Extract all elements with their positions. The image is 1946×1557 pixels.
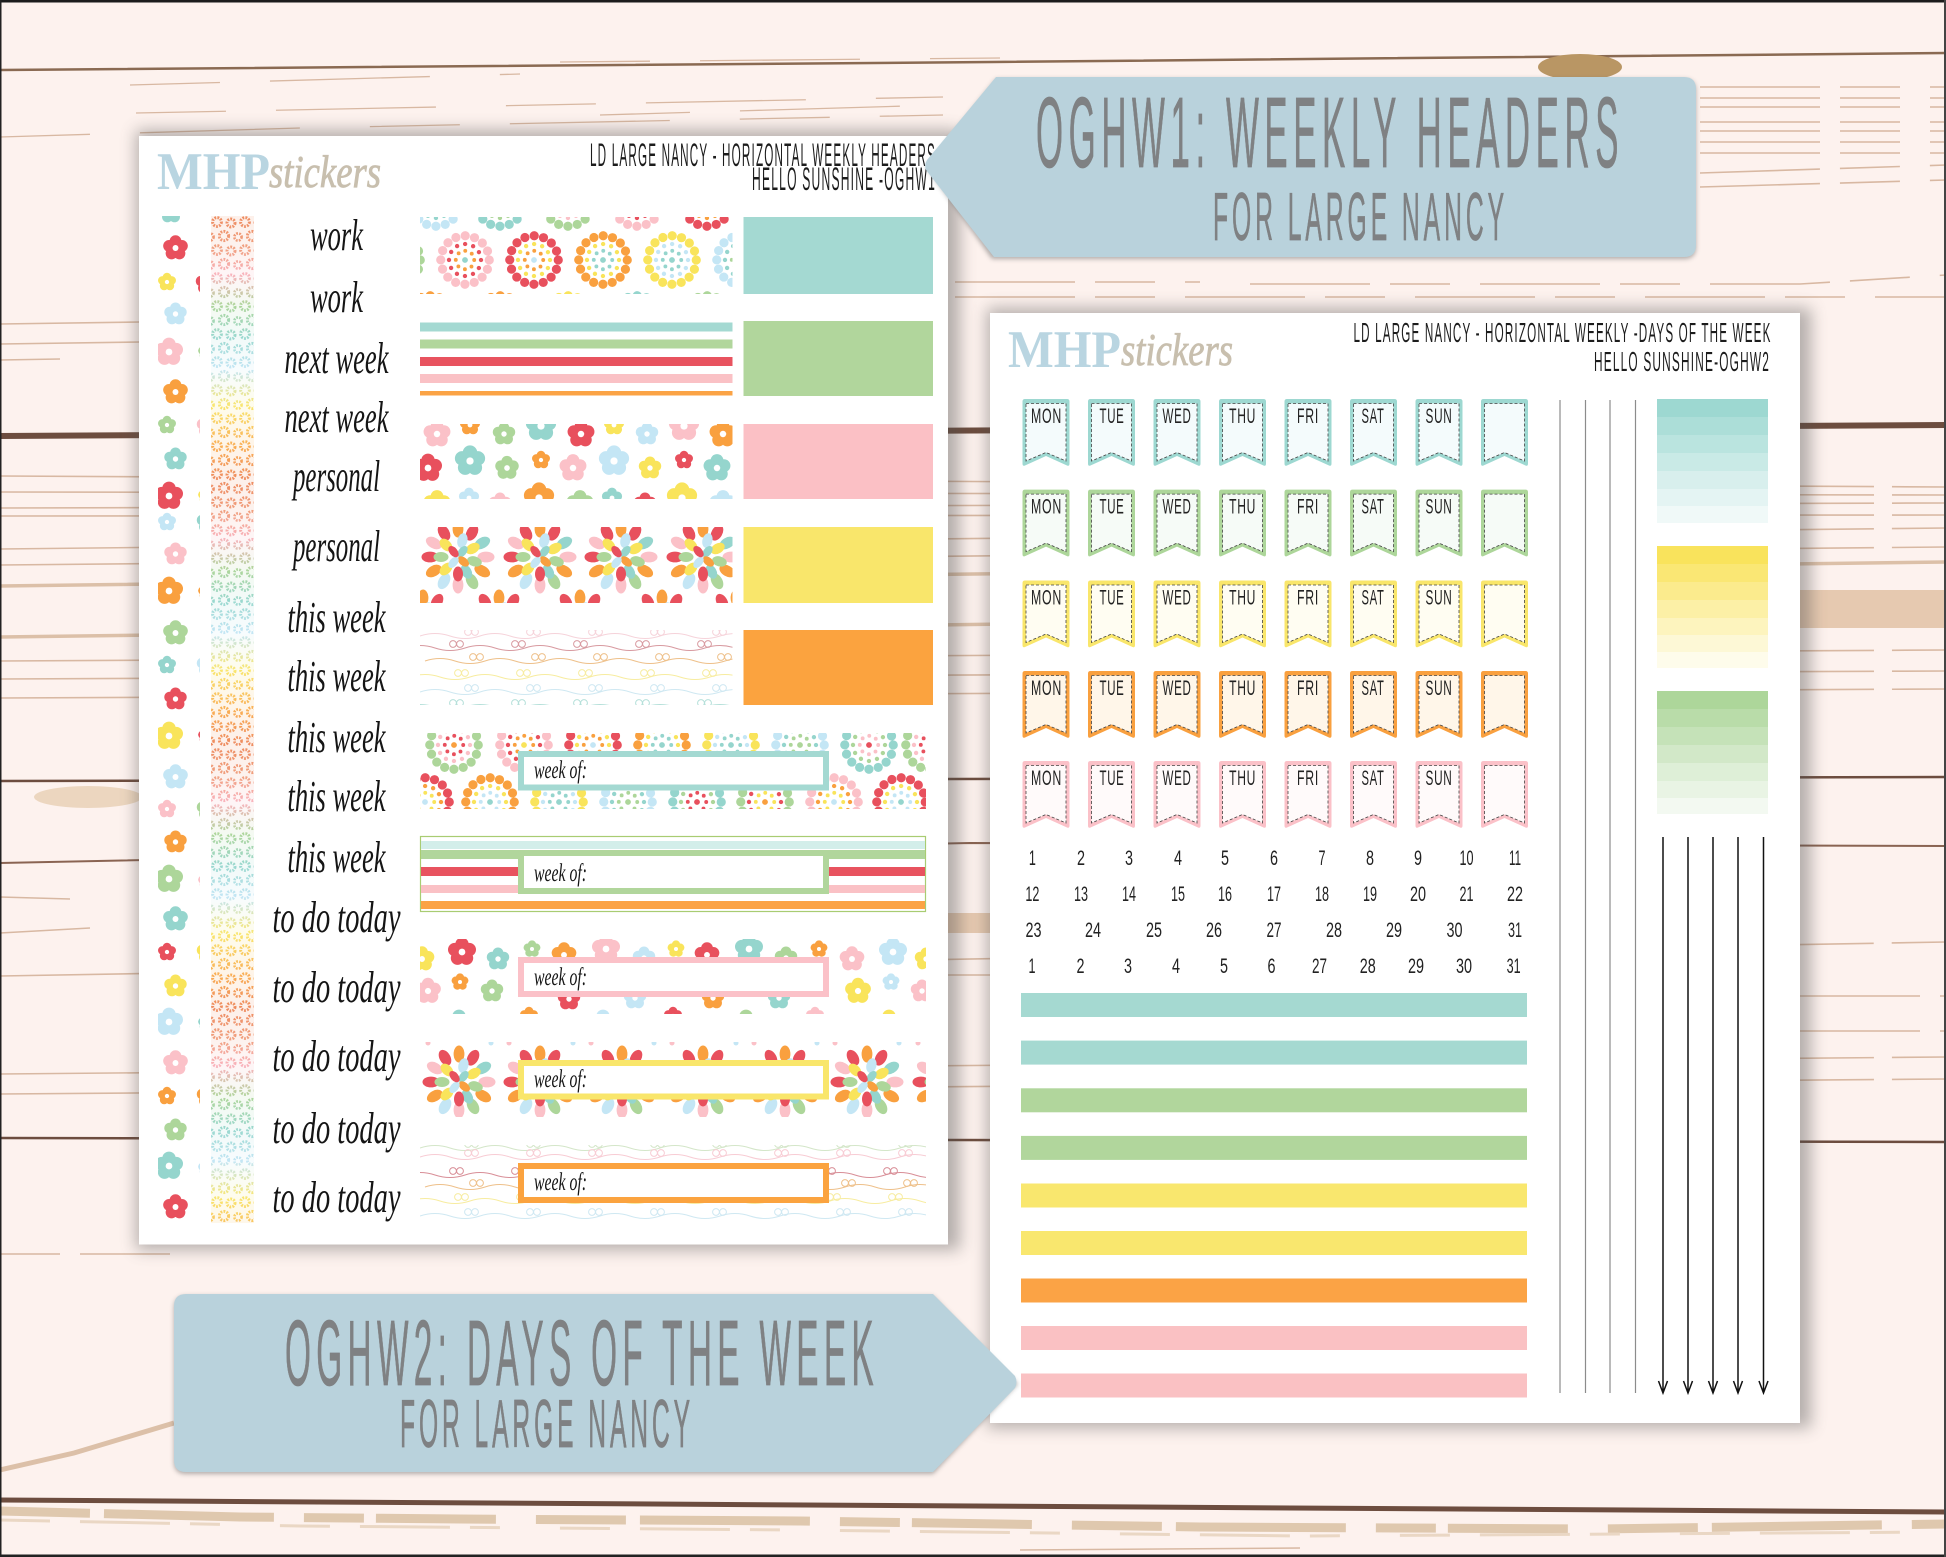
sheet 1 header text: [590, 137, 936, 197]
flag row: orange: [1022, 671, 1528, 738]
date numbers grid: 12: [1025, 883, 1039, 906]
header strip 4: petal bursts with week-of label: week of:: [534, 1066, 587, 1093]
date numbers grid: 29: [1386, 919, 1402, 942]
flag row: pink: SUN: [1426, 767, 1452, 790]
script word column: to do today: [272, 1032, 401, 1081]
sheet 2: days of the week: [987, 308, 1811, 1428]
header strip 1: rosettes with week-of label: [420, 733, 926, 809]
header strip 2: stripes with week-of label: week of:: [534, 860, 587, 887]
header strip 4: petal bursts with week-of label: [422, 1042, 926, 1117]
tag: OGHW1 weekly headers: [925, 77, 1696, 259]
date numbers grid: 11: [1509, 847, 1521, 870]
date numbers grid: [1025, 847, 1523, 978]
flag row: yellow: WED: [1162, 586, 1192, 610]
date numbers grid: 14: [1122, 883, 1136, 906]
header strip 1: rosettes with week-of label: week of:: [534, 757, 587, 784]
script word column: work: [310, 211, 364, 260]
colour block: teal: [744, 217, 933, 294]
vertical hairlines: [1560, 400, 1636, 1393]
flag row: orange: SAT: [1362, 677, 1384, 700]
flag row: teal: TUE: [1100, 405, 1124, 428]
flag row: green: WED: [1162, 496, 1192, 519]
date numbers grid: 10: [1460, 847, 1474, 870]
flag row: yellow: [1022, 580, 1528, 647]
colour block: pink: [744, 424, 933, 499]
date numbers grid: 22: [1507, 883, 1523, 906]
date numbers grid: 25: [1146, 919, 1162, 942]
text: LD LARGE NANCY - HORIZONTAL WEEKLY HEADERS: [590, 137, 936, 173]
script word column: this week: [288, 593, 386, 642]
date numbers grid: 18: [1315, 883, 1329, 906]
date numbers grid: 6: [1270, 847, 1278, 870]
date numbers grid: 13: [1074, 883, 1088, 906]
flag row: green: [1022, 490, 1528, 556]
flag row: yellow: MON: [1031, 586, 1062, 610]
flag row: green: MON: [1031, 496, 1062, 519]
flag row: teal: SUN: [1426, 405, 1452, 428]
script word column: personal: [291, 452, 380, 501]
script word column: this week: [288, 833, 386, 882]
colour block: orange: [744, 630, 933, 705]
date numbers grid: 5: [1220, 955, 1228, 978]
flower column strip: [158, 216, 200, 1218]
flag row: yellow: SAT: [1362, 586, 1384, 610]
date numbers grid: 16: [1218, 883, 1232, 906]
header strip 3: flowers with week-of label: [420, 939, 926, 1014]
script word column: next week: [284, 334, 389, 383]
pattern strip: stripes: [420, 322, 732, 396]
script word column: work: [310, 273, 364, 322]
date numbers grid: 31: [1507, 955, 1521, 978]
script word column: to do today: [272, 1173, 401, 1222]
pattern strip: bow waves: [420, 630, 732, 705]
flag row: orange: SUN: [1426, 677, 1452, 700]
flag row: pink: [1022, 761, 1528, 828]
date numbers grid: 2: [1077, 847, 1085, 870]
script word column: this week: [288, 772, 386, 821]
flag row: green: FRI: [1297, 496, 1319, 519]
date numbers grid: 4: [1172, 955, 1180, 978]
flag row: orange: TUE: [1100, 677, 1124, 700]
script word column: this week: [288, 652, 386, 701]
date numbers grid: 3: [1124, 955, 1132, 978]
flag row: green: TUE: [1100, 496, 1124, 519]
header strip 2: stripes with week-of label: [420, 836, 926, 912]
date numbers grid: 3: [1125, 847, 1133, 870]
pattern strip: dotted rosettes: [420, 217, 732, 294]
header strip 5: bow waves with week-of label: week of:: [534, 1169, 587, 1196]
date numbers grid: 29: [1408, 955, 1424, 978]
flag row: orange: MON: [1031, 677, 1062, 700]
date numbers grid: 1: [1029, 847, 1036, 870]
logo: MHP stickers: MHP: [1008, 321, 1121, 379]
script word column: [272, 211, 401, 1222]
ombre swatch: green: [1657, 691, 1768, 814]
date numbers grid: 21: [1460, 883, 1474, 906]
flag row: green: THU: [1229, 496, 1256, 519]
logo: MHP stickers: [1008, 321, 1233, 379]
pattern strip: scattered flowers: [420, 424, 732, 499]
flag row: teal: THU: [1229, 405, 1256, 428]
flag row: orange: THU: [1229, 677, 1256, 700]
logo: MHP stickers: stickers: [1121, 324, 1233, 375]
rainbow floral strip: [211, 216, 254, 1223]
tag: OGHW2 days of the week: [174, 1294, 1018, 1474]
flag row: pink: FRI: [1297, 767, 1319, 790]
flag row: orange: FRI: [1297, 677, 1319, 700]
script word column: to do today: [272, 963, 401, 1012]
ombre swatch: yellow: [1657, 546, 1768, 668]
horizontal colour bars: [1021, 993, 1527, 1398]
pattern strip: petal bursts: [420, 527, 732, 603]
flag row: pink: TUE: [1100, 767, 1124, 790]
date numbers grid: 19: [1363, 883, 1377, 906]
colour block: green: [744, 321, 933, 396]
date numbers grid: 6: [1268, 955, 1276, 978]
flag row: teal: [1022, 399, 1528, 466]
flag row: teal: SAT: [1362, 405, 1384, 428]
flag row: teal: MON: [1031, 405, 1062, 428]
date numbers grid: 4: [1174, 847, 1182, 870]
date numbers grid: 27: [1312, 955, 1327, 978]
date numbers grid: 31: [1508, 919, 1522, 942]
script word column: to do today: [272, 1104, 401, 1153]
date numbers grid: 2: [1076, 955, 1084, 978]
text: HELLO SUNSHINE -OGHW1: [752, 161, 936, 197]
date numbers grid: 1: [1028, 955, 1036, 978]
date numbers grid: 28: [1326, 919, 1342, 942]
header strip 3: flowers with week-of label: week of:: [534, 964, 587, 991]
text: OGHW2: DAYS OF THE WEEK: [285, 1301, 879, 1405]
tag: OGHW2 days of the week: FOR LARGE NANCY: [400, 1386, 694, 1462]
script word column: next week: [284, 393, 389, 442]
date numbers grid: 30: [1446, 919, 1462, 942]
flag row: teal: FRI: [1297, 405, 1319, 428]
date numbers grid: 15: [1171, 883, 1185, 906]
date numbers grid: 8: [1366, 847, 1374, 870]
logo: MHP stickers: MHP: [157, 143, 270, 201]
flag row: yellow: FRI: [1297, 586, 1319, 610]
header strip 5: bow waves with week-of label: [420, 1145, 926, 1219]
date numbers grid: 20: [1410, 883, 1426, 906]
flag row: pink: THU: [1229, 767, 1256, 790]
script word column: personal: [291, 522, 380, 571]
colour block: yellow: [744, 527, 933, 603]
ombre swatch: teal: [1657, 399, 1768, 523]
flag row: orange: WED: [1162, 677, 1192, 700]
date numbers grid: 26: [1206, 919, 1222, 942]
flag row: green: SUN: [1426, 496, 1452, 519]
date numbers grid: 28: [1360, 955, 1376, 978]
date numbers grid: 23: [1026, 919, 1042, 942]
flag row: pink: MON: [1031, 767, 1062, 790]
sheet 2 header text: [1354, 317, 1772, 377]
date numbers grid: 27: [1266, 919, 1282, 942]
flag row: teal: WED: [1162, 405, 1192, 428]
flag row: yellow: SUN: [1426, 586, 1452, 610]
logo: MHP stickers: [157, 143, 381, 201]
date numbers grid: 17: [1267, 883, 1281, 906]
script word column: to do today: [272, 893, 401, 942]
logo: MHP stickers: stickers: [269, 146, 381, 197]
date numbers grid: 24: [1085, 919, 1101, 942]
arrow lines: [1658, 837, 1768, 1393]
flag row: pink: SAT: [1362, 767, 1384, 790]
date numbers grid: 9: [1414, 847, 1422, 870]
flag row: green: SAT: [1362, 496, 1384, 519]
script word column: this week: [288, 713, 386, 762]
flag row: yellow: TUE: [1100, 586, 1124, 610]
flag row: pink: WED: [1162, 767, 1192, 790]
date numbers grid: 5: [1221, 847, 1229, 870]
flag row: yellow: THU: [1229, 586, 1256, 610]
date numbers grid: 30: [1456, 955, 1472, 978]
date numbers grid: 7: [1318, 847, 1326, 870]
sheet 1: weekly headers: [136, 130, 986, 1250]
